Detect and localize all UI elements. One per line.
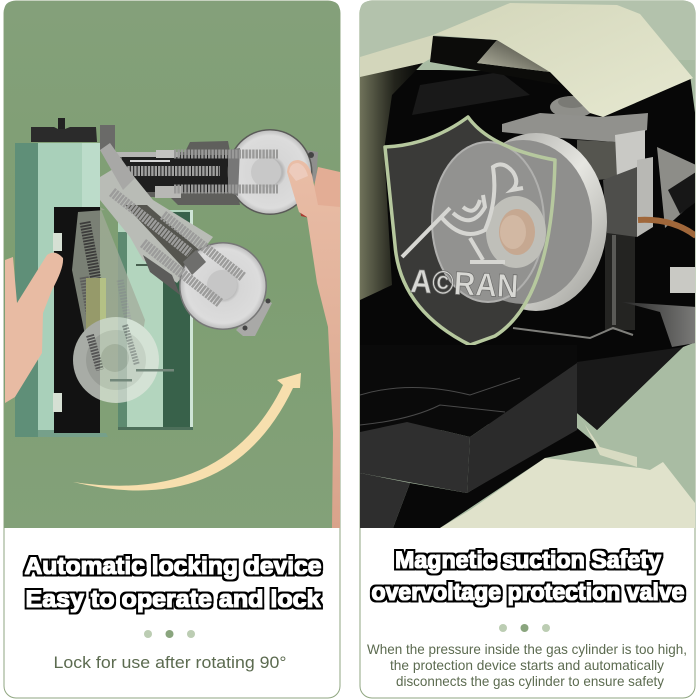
panel: magnetic safety valve <box>360 0 696 698</box>
card background <box>360 1 695 698</box>
ghost arm and disc (start position) <box>72 207 159 403</box>
valve disc <box>504 133 607 311</box>
product photo: safety valve close-up <box>360 0 696 528</box>
caption: When the pressure inside the gas cylinder is too high, <box>367 641 687 657</box>
device body <box>15 143 108 437</box>
heading: automatic locking device: Automatic locking device <box>24 553 322 580</box>
top cream cover <box>360 3 693 117</box>
bottom black tray <box>360 345 600 528</box>
caption <box>367 641 687 689</box>
heading: magnetic suction safety valve: Magnetic suction Safety <box>395 547 662 574</box>
shield logo: bird <box>402 164 523 262</box>
shield emblem <box>383 115 557 345</box>
horizontal arm (locked position) <box>100 125 318 215</box>
caption: disconnects the gas cylinder to ensure safety <box>396 673 664 689</box>
pagination dots <box>144 630 195 638</box>
hand: left holding device <box>5 253 63 403</box>
open door (translucent) <box>118 210 193 430</box>
heading: magnetic suction safety valve <box>372 547 684 606</box>
valve block <box>502 96 696 347</box>
heading: automatic locking device: Easy to operate and lock <box>26 586 321 613</box>
caption: Lock for use after rotating 90° <box>54 653 286 672</box>
pagination dots <box>499 624 550 632</box>
card background <box>4 1 340 698</box>
ghost disc pins <box>110 369 174 382</box>
heading: automatic locking device <box>24 553 322 613</box>
bottom cream cover <box>440 413 695 528</box>
hand: right holding disc <box>287 160 340 528</box>
heading: magnetic suction safety valve: overvoltage protection valve <box>372 579 684 606</box>
shield logo: brand name: A©RAN <box>410 262 519 305</box>
panel: automatic locking device <box>4 0 340 698</box>
caption: the protection device starts and automatically <box>390 657 664 673</box>
arrow: rotation direction <box>73 373 301 490</box>
product photo: rotating gas cylinder holder <box>4 0 340 528</box>
device top cap <box>31 118 97 142</box>
diagonal arm (mid rotation) <box>100 143 272 336</box>
interior dark housing <box>360 63 696 440</box>
